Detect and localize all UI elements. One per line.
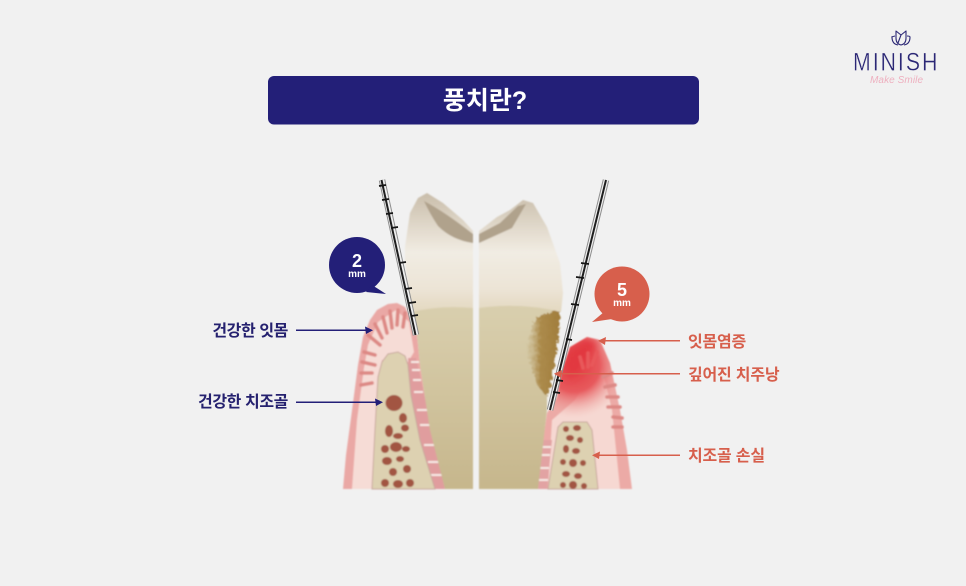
label: healthy bone: 건강한 치조골 — [198, 393, 289, 411]
arrow: healthy bone — [296, 398, 383, 406]
probe: affected side — [550, 180, 606, 410]
ligament remnant — [538, 440, 552, 489]
label: bone loss: 치조골 손실 — [688, 447, 765, 465]
callout: 5 mm — [592, 266, 650, 322]
probe: healthy side — [379, 180, 418, 335]
tagline: Make Smile — [870, 75, 923, 86]
inflamed gum — [538, 337, 632, 489]
affected tooth root — [479, 300, 560, 489]
heading: 풍치란? — [443, 87, 527, 115]
bone marrow — [560, 425, 587, 489]
healthy bone — [372, 352, 435, 489]
label: healthy gum: 건강한 잇몸 — [212, 322, 289, 340]
gum papillae — [580, 352, 622, 427]
label: gum inflammation: 잇몸염증 — [688, 333, 747, 351]
healthy ligament — [408, 358, 445, 489]
logo: Minish — [853, 31, 939, 86]
gum papillae — [361, 310, 405, 385]
reduced bone — [548, 422, 598, 489]
arrow: gum inflammation — [598, 337, 680, 345]
affected tooth crown — [479, 200, 563, 312]
arrow: healthy gum — [296, 326, 373, 334]
label: deep pocket: 깊어진 치주낭 — [688, 366, 780, 384]
tooth diagram: healthy side — [343, 193, 473, 489]
callout: 2 mm: mm — [348, 269, 366, 280]
tooth diagram: periodontitis side — [479, 200, 632, 489]
wordmark: MINISH — [853, 48, 939, 76]
callout: 2 mm — [329, 237, 386, 294]
tartar deposit — [526, 309, 561, 397]
healthy gum — [343, 303, 445, 489]
healthy tooth crown — [405, 193, 473, 312]
arrow: deep pocket — [554, 370, 680, 378]
title bar — [268, 76, 699, 124]
callout: 5 mm: 5 — [617, 280, 627, 300]
bone marrow — [381, 395, 414, 488]
callout: 5 mm: mm — [613, 298, 631, 309]
arrow: bone loss — [592, 452, 680, 459]
icon: tulip — [892, 31, 910, 45]
callout: 2 mm: 2 — [352, 251, 362, 271]
healthy tooth root — [411, 300, 473, 489]
